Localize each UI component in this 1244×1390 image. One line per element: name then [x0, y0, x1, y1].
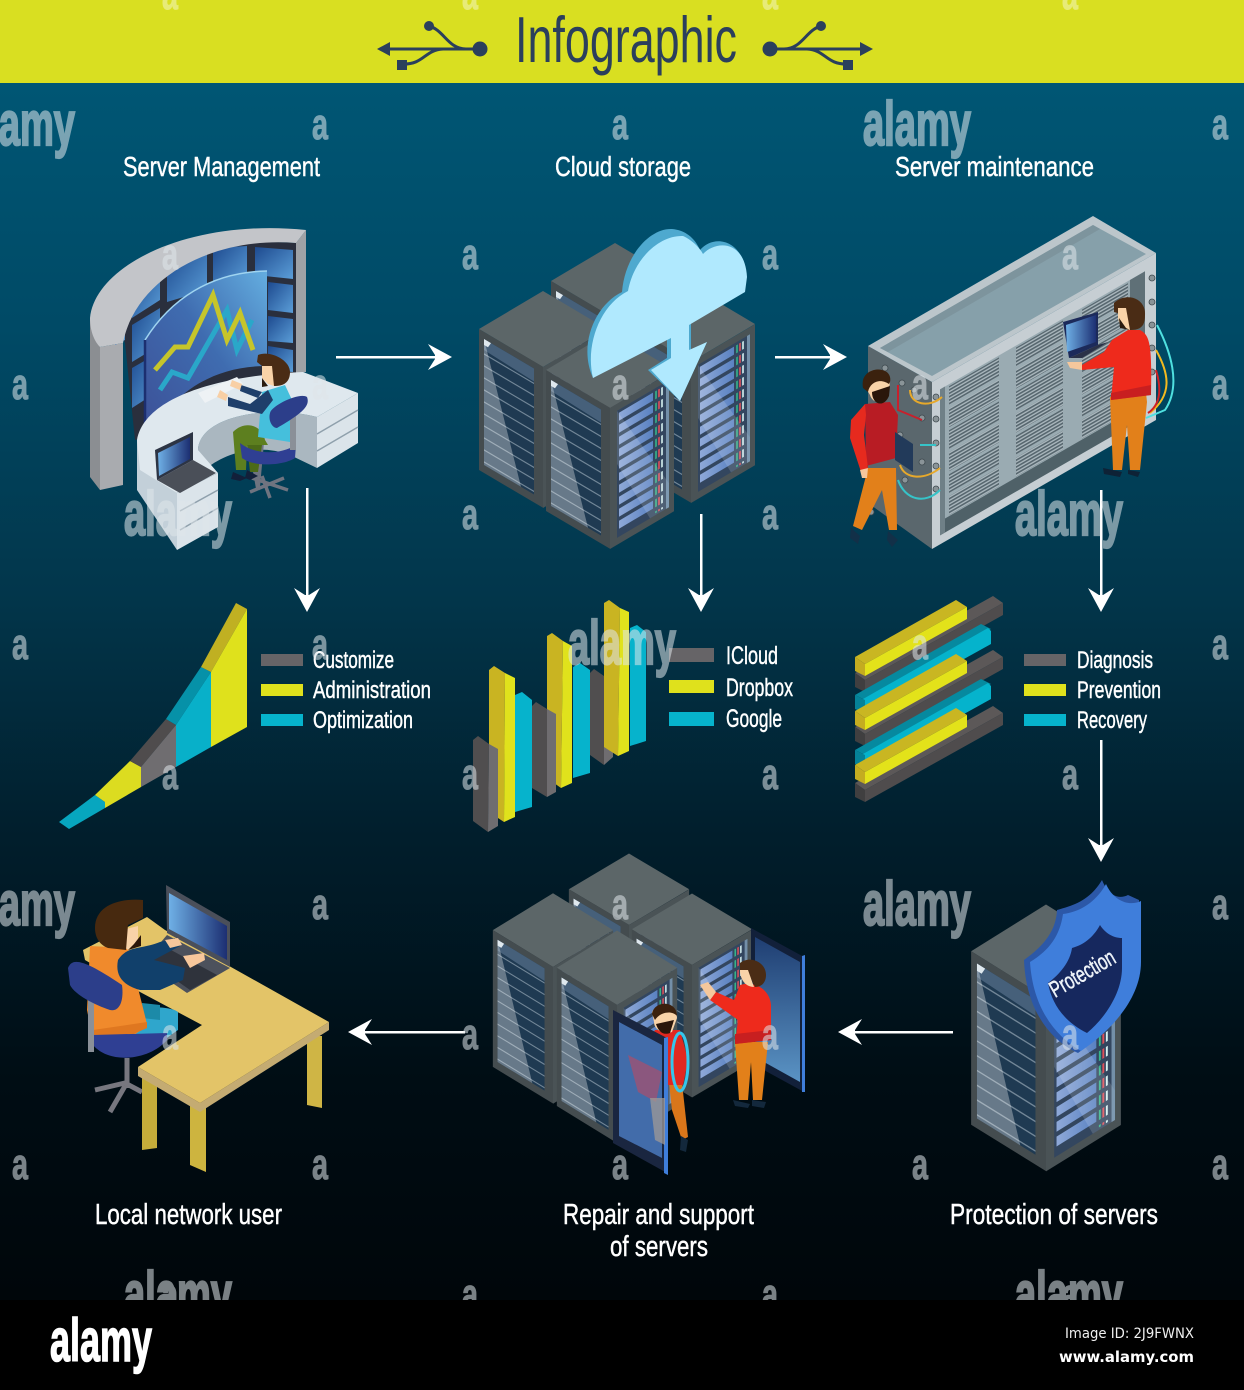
watermarks: alamy [863, 90, 971, 159]
legend: management: Customize [313, 647, 394, 674]
watermarks: a [12, 620, 28, 669]
arrow: legend to protection [1088, 740, 1114, 862]
watermarks: a [1212, 880, 1228, 929]
illustration: repair and support [493, 854, 805, 1175]
legend: maintenance: Recovery [1077, 707, 1147, 734]
legend: maintenance: Prevention [1077, 677, 1161, 704]
person: technician at right rack [700, 960, 771, 1108]
legend: management: Optimization [313, 707, 413, 734]
watermarks: a [312, 360, 328, 409]
chart: horizontal bars [855, 596, 1003, 802]
chart: area chart [59, 603, 247, 829]
watermarks: a [312, 880, 328, 929]
watermarks: a [1062, 1010, 1078, 1059]
watermarks: a [12, 1140, 28, 1189]
person: technician behind door [640, 1004, 688, 1152]
watermarks: a [762, 750, 778, 799]
watermarks: alamy [1015, 1260, 1123, 1329]
connectors [868, 275, 1155, 515]
legend: management: Administration [313, 677, 431, 704]
caption: protection of servers: Protection of servers [950, 1199, 1158, 1231]
legend: maintenance [1024, 647, 1161, 734]
watermarks: a [762, 1010, 778, 1059]
watermarks: a [912, 620, 928, 669]
footer band [0, 1300, 1244, 1390]
legend: cloud: ICloud [726, 642, 778, 670]
watermarks: a [612, 880, 628, 929]
watermarks: a [1062, 230, 1078, 279]
heading: cloud storage: Cloud storage [555, 151, 691, 182]
watermarks: a [762, 1270, 778, 1319]
watermarks: alamy [124, 480, 232, 549]
legend: cloud: Google [726, 705, 782, 733]
illustration: protection of servers [971, 880, 1141, 1171]
person: technician right [1063, 297, 1151, 477]
arrow: management to chart [294, 488, 320, 612]
door: right rack [751, 928, 805, 1092]
chart: vertical bars [473, 600, 646, 832]
watermarks: a [612, 1140, 628, 1189]
watermarks: alamy [863, 870, 971, 939]
heading: server management: Server Management [123, 151, 320, 182]
watermarks: a [1212, 1140, 1228, 1189]
arrow: maintenance to chart [1088, 490, 1114, 612]
cloud icon [587, 229, 747, 401]
watermarks: a [762, 230, 778, 279]
icon: usb left [377, 21, 488, 70]
arrow: repair to user [348, 1019, 465, 1045]
watermarks: a [162, 750, 178, 799]
watermarks: alamy [1015, 480, 1123, 549]
watermarks: a [162, 1270, 178, 1319]
door: front rack [613, 1010, 668, 1175]
icon: usb right [762, 21, 873, 70]
footer: image id: Image ID: 2J9FWNX [1065, 1326, 1194, 1342]
watermarks: alamy [124, 1260, 232, 1329]
caption: repair and support: Repair and support [563, 1199, 754, 1231]
arrow: management to cloud [336, 344, 452, 370]
watermarks: a [462, 750, 478, 799]
watermarks: a [312, 1140, 328, 1189]
shield label: Protection [1044, 944, 1120, 1002]
caption: local network user: Local network user [95, 1199, 282, 1231]
footer: website: www.alamy.com [1059, 1348, 1194, 1366]
arrow: protection to repair [838, 1019, 953, 1045]
icon: protection shield [1024, 880, 1141, 1053]
arrow: cloud to maintenance [775, 344, 847, 370]
caption: of servers: of servers [610, 1231, 708, 1263]
watermarks: a [1212, 620, 1228, 669]
watermarks: a [762, 490, 778, 539]
footer: alamy logo: alamy [50, 1307, 152, 1374]
watermarks: a [1062, 750, 1078, 799]
watermarks: a [462, 230, 478, 279]
watermarks: a [912, 1140, 928, 1189]
watermarks: a [612, 100, 628, 149]
legend: cloud: Dropbox [726, 674, 793, 702]
watermarks: a [462, 1010, 478, 1059]
illustration: server maintenance [850, 216, 1173, 549]
legend: cloud [669, 642, 793, 733]
watermarks: a [462, 490, 478, 539]
watermarks: alamy [568, 609, 676, 678]
title: Infographic [515, 3, 737, 76]
arrow: cloud to chart [688, 514, 714, 612]
header band [0, 0, 1244, 83]
watermarks: a [312, 100, 328, 149]
person: technician left [850, 370, 913, 547]
cables: right side [1146, 325, 1173, 418]
watermarks: a [162, 230, 178, 279]
watermarks: a [1212, 100, 1228, 149]
legend: management [261, 647, 431, 734]
watermarks: a [12, 360, 28, 409]
watermarks: a [612, 360, 628, 409]
illustration: local network user [68, 885, 329, 1172]
watermarks: a [1062, 1270, 1078, 1319]
heading: server maintenance: Server maintenance [895, 151, 1094, 182]
watermarks: a [462, 1270, 478, 1319]
watermarks: a [1212, 360, 1228, 409]
watermarks: a [312, 620, 328, 669]
illustration: server management desk [90, 228, 358, 550]
illustration: cloud storage racks [479, 229, 755, 549]
watermarks: a [162, 1010, 178, 1059]
watermarks: a [912, 360, 928, 409]
cables: left side [898, 385, 942, 499]
legend: maintenance: Diagnosis [1077, 647, 1153, 674]
